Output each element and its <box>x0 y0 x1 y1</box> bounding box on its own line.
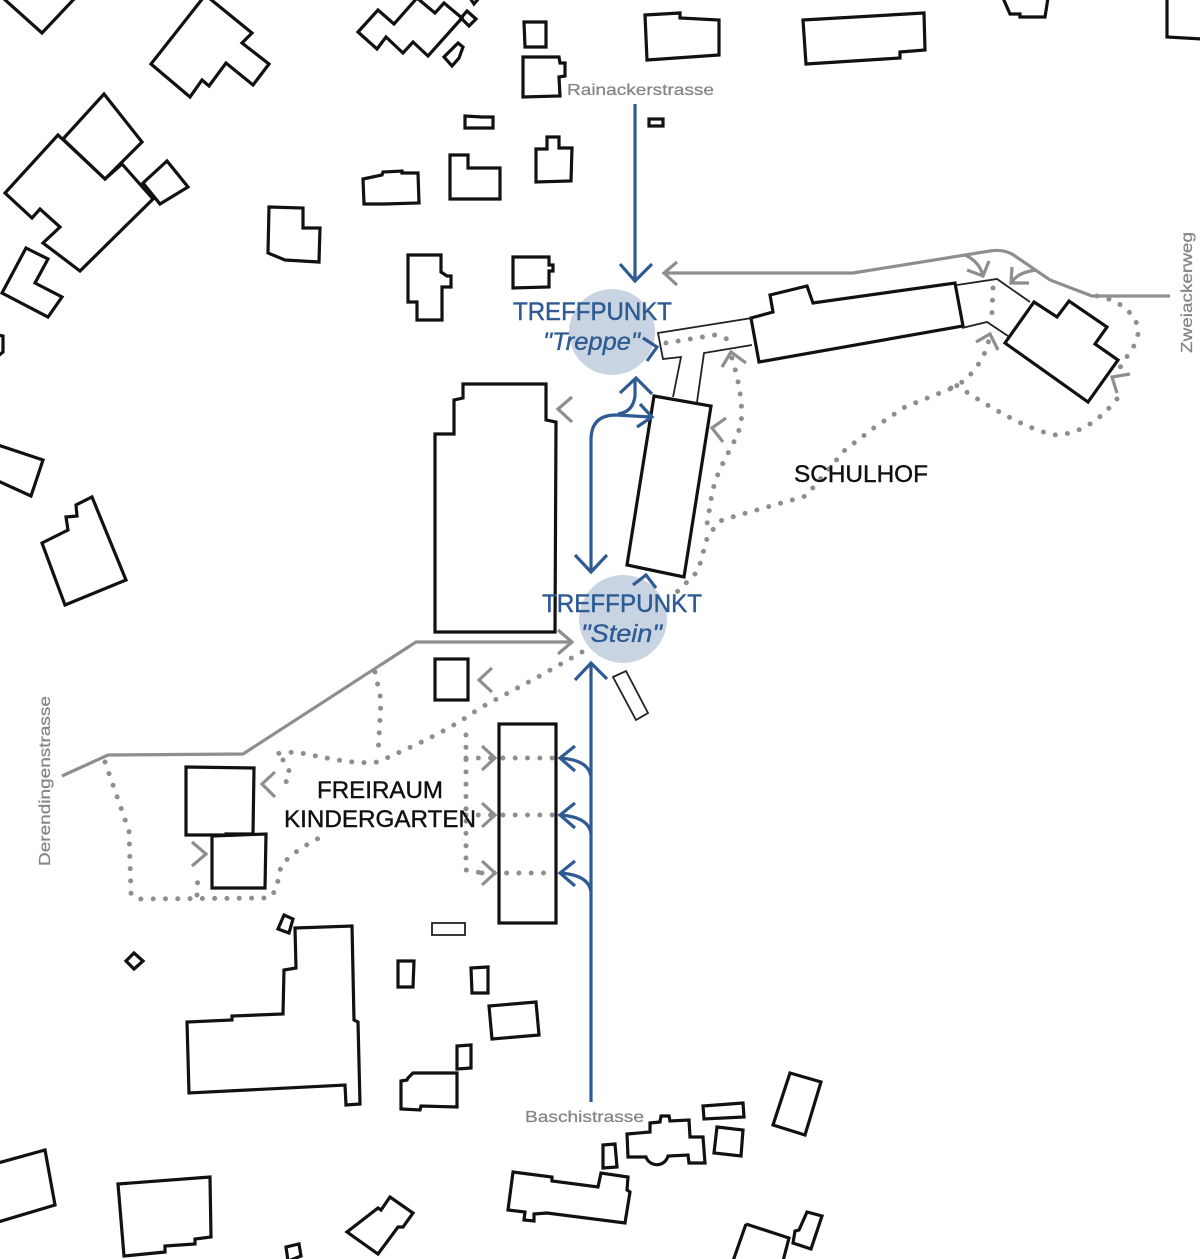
street label: Rainackerstrasse: Rainackerstrasse <box>567 82 714 99</box>
street label: Derendingenstrasse: Derendingenstrasse <box>37 696 54 866</box>
dotted footpaths <box>105 288 1138 899</box>
street label: Zweiackerweg: Zweiackerweg <box>1179 232 1196 353</box>
area label: Schulhof: SCHULHOF <box>794 461 928 488</box>
meeting point circles <box>569 289 667 663</box>
meeting point label: Treppe: "Treppe" <box>543 328 641 356</box>
grey road arrows <box>62 250 1170 885</box>
area label: Freiraum Kindergarten <box>284 777 476 833</box>
covered walkways <box>432 279 1030 935</box>
area label: Freiraum Kindergarten: KINDERGARTEN <box>284 806 476 833</box>
meeting point label: Treppe: TREFFPUNKT <box>513 298 672 326</box>
meeting point label: Treppe <box>513 298 672 356</box>
meeting point label: Stein <box>542 590 702 648</box>
meeting point label: Stein: "Stein" <box>581 620 663 648</box>
school buildings <box>186 283 1118 923</box>
area label: Freiraum Kindergarten: FREIRAUM <box>317 777 443 804</box>
meeting point label: Stein: TREFFPUNKT <box>542 590 702 618</box>
blue access arrows <box>560 104 657 1102</box>
street label: Baschistrasse: Baschistrasse <box>525 1109 644 1126</box>
